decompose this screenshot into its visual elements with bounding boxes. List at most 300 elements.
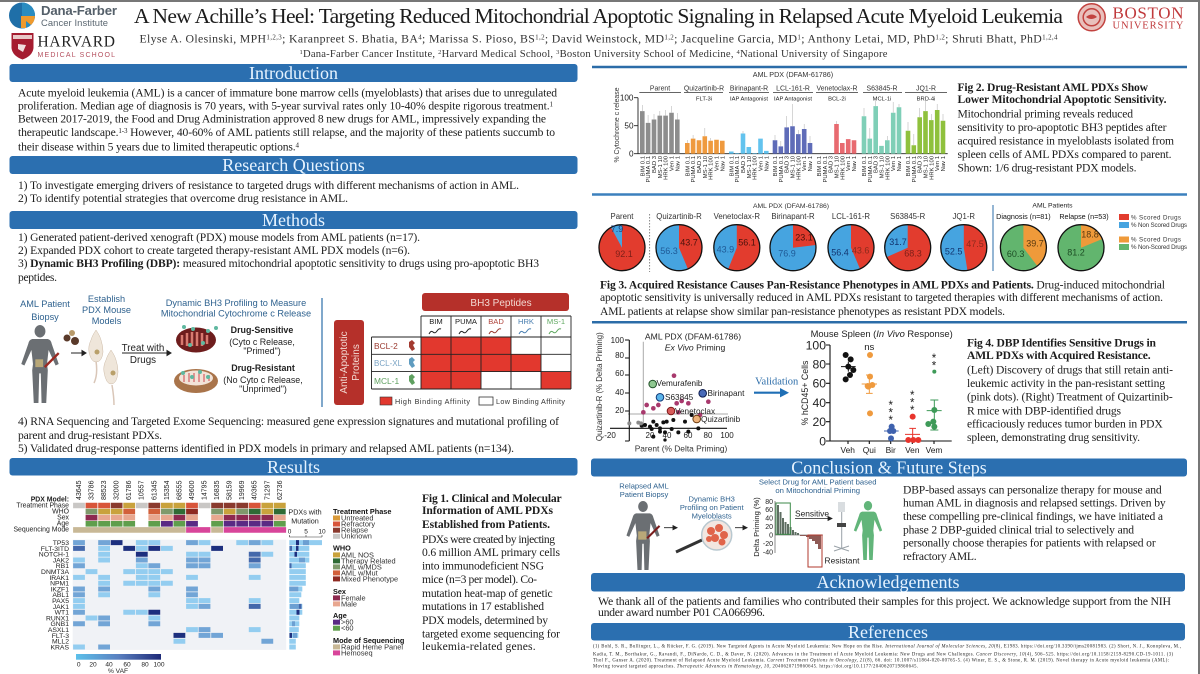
legend: sex: Male — [341, 599, 357, 608]
logo: Boston University — [1078, 4, 1184, 32]
significance markers: * — [910, 398, 915, 410]
text block: figure 2 caption: sensitivity to pro-apoptotic BH3 peptides after — [958, 121, 1167, 134]
gene labels: RUNX1 — [46, 615, 69, 622]
chart: PDXs with mutation bars: 5 — [304, 528, 308, 536]
peptide labels: HRK — [518, 317, 534, 326]
legend: pie charts: % Scored Drugs — [1131, 214, 1181, 222]
text block: introduction: their disease within 5 years due to limited therapeutic options. — [18, 140, 296, 154]
legend: mode of sequencing: Rapid Heme Panel — [341, 642, 403, 651]
logo: Harvard Medical School: MEDICAL SCHOOL — [38, 52, 115, 59]
dot plot axes: 20 — [812, 415, 826, 429]
text block: figure 1 caption: mice (n=3 per model). Co- — [422, 573, 537, 586]
pie labels: Venetoclax-R — [714, 212, 760, 221]
authors: 1,2 — [535, 34, 545, 42]
axes — [614, 87, 948, 163]
error bars — [642, 101, 943, 146]
affiliations: 1 — [300, 49, 303, 56]
drug tick labels: Ven 1 — [891, 156, 897, 171]
chart: PDXs with mutation bars: 10 — [318, 528, 326, 536]
logo: Harvard Medical School: HARVARD — [38, 34, 115, 50]
pie: birinapant-R — [770, 225, 816, 271]
pie labels: JQ1-R — [953, 212, 975, 221]
label: relapsed AML biopsy — [619, 482, 669, 499]
legend: mode of sequencing — [333, 636, 404, 657]
group headers: Venetoclax-R — [817, 86, 858, 92]
chart: PDXs with mutation bars: PDXs with — [288, 508, 322, 516]
text block: conclusion: these compelling pre-clinical findings, we have initiated a — [903, 510, 1163, 523]
text: drug-resistant: (No Cyto c Release, — [223, 375, 303, 385]
pie: venetoclax-R — [714, 225, 760, 271]
scatter titles: Ex Vivo Priming — [665, 342, 725, 352]
text: drug-sensitive — [229, 325, 295, 356]
pie labels: LCL-161-R — [832, 212, 870, 221]
heading: references: References — [848, 622, 928, 642]
label: dynamic BH3 profiling on myeloblasts — [680, 494, 744, 520]
heading: anti-apoptotic proteins: Proteins — [351, 344, 362, 381]
text block: introduction: therapeutic landscape. — [18, 126, 119, 139]
dot plot axes — [800, 338, 952, 455]
text block: introduction: 4 — [296, 142, 300, 150]
peptide labels: BAD — [488, 317, 504, 326]
drug tick labels: HRK 100 — [885, 155, 891, 180]
scatter points — [627, 373, 711, 442]
dot plot axes: 40 — [812, 396, 826, 410]
model id labels: 61786 — [126, 480, 133, 500]
pie labels: Diagnosis (n=81) — [996, 212, 1051, 221]
chart title: AML PDX (DFAM-61786) — [753, 70, 833, 79]
scatter axes: 20 — [615, 406, 625, 415]
drug tick labels: BIM 0.1 — [906, 156, 912, 176]
bars: LCL-161-R — [775, 126, 810, 154]
group headers: IAP Antagonist — [774, 96, 812, 102]
scatter axes: 100 — [611, 336, 625, 345]
text block: conclusion — [903, 484, 1166, 563]
legend: binding affinity — [380, 397, 565, 406]
drug tick labels: BAD 3 — [697, 155, 703, 173]
annotation tracks — [73, 506, 286, 530]
label: dynamic BH3 profiling on myeloblasts: Myeloblasts — [692, 512, 732, 520]
annotation row labels — [13, 496, 70, 534]
group headers: LCL-161-R — [776, 86, 810, 92]
legend: WHO: WHO — [333, 544, 351, 552]
group headers: S63845-R — [866, 86, 898, 92]
text block: methods steps 1-3: 3) Dynamic BH3 Profiling (DBP): measured mitochondrial apoptotic sensitivity to drugs using pro-apoptotic BH3 — [18, 257, 539, 270]
affiliations: Dana-Farber Cancer Institute, — [303, 49, 438, 60]
pie: JQ1-R — [941, 225, 987, 271]
label: dynamic BH3 profiling — [161, 298, 311, 318]
text block: methods steps 1-3: 1) Generated patient-derived xenograft (PDX) mouse models from AML patients (n=17). — [18, 231, 420, 244]
drug tick labels: Ven 1 — [758, 156, 764, 171]
icon: IV stand — [834, 502, 849, 551]
pie: diagnosis: 60.3 — [1007, 249, 1024, 259]
text block: figure 4 caption: Fig 4. DBP Identifies Sensitive Drugs in — [967, 336, 1157, 350]
legend: binding affinity: Low Binding Affinity — [496, 397, 565, 406]
scatter axes: Parent (% Delta Priming) — [635, 444, 728, 454]
text block: figure 1 caption: mutations in 17 established — [422, 600, 544, 613]
label: establish PDX mouse models: Establish — [88, 294, 125, 304]
dot plot axes: % hCD45+ Cells — [800, 360, 810, 425]
pie labels — [611, 212, 1109, 221]
dot plot axes: Bir — [886, 445, 896, 455]
model id labels — [76, 480, 284, 500]
icon: human figure responder — [854, 501, 882, 560]
gene labels: MLL2 — [52, 639, 69, 646]
group headers: FLT-3i — [696, 96, 712, 102]
chart: delta priming waterfall: 80 — [765, 499, 773, 506]
group headers: BCL-2i — [828, 96, 846, 102]
text block: research questions — [18, 179, 519, 205]
chart: delta priming waterfall: 20 — [765, 524, 773, 531]
group headers: IAP Antagonist — [730, 96, 768, 102]
pie: diagnosis: 39.7 — [1026, 238, 1044, 248]
text block: figure 1 caption: targeted exome sequencing for — [422, 628, 560, 640]
pie: LCL-161-R: 43.6 — [852, 245, 869, 255]
heading: introduction — [10, 63, 578, 83]
chart: delta priming waterfall: -40 — [763, 550, 773, 556]
drug tick labels: Ven 1 — [714, 156, 720, 171]
heading: acknowledgements — [591, 572, 1185, 592]
peptide labels — [429, 317, 565, 334]
heading: methods — [10, 210, 578, 230]
icon: patient cells — [64, 330, 79, 345]
model id labels: 49600 — [189, 480, 196, 500]
legend: WHO: Therapy Related — [341, 556, 396, 565]
scatter axes: 80 — [704, 431, 713, 440]
drug tick labels: PUMA 0.1 — [823, 156, 829, 183]
legend: treatment phase — [333, 507, 391, 541]
text block: figure 1 caption: PDX models, determined by — [422, 614, 548, 627]
drug tick labels: MS-1 10 — [790, 155, 796, 178]
chart titles — [753, 202, 1073, 210]
drug tick labels: Nav 1 — [808, 156, 814, 171]
drug tick labels: PUMA 0.1 — [868, 156, 874, 183]
legend: colour scale: 100 — [153, 662, 165, 668]
text: drug-sensitive: (Cyto c Release, — [229, 337, 295, 347]
text block: methods steps 1-3: 2) Expanded PDX cohort to create targeted therapy-resistant AML PDX models (n=6). — [18, 244, 410, 257]
drug tick labels: PUMA 0.1 — [646, 156, 652, 183]
legend: sex: Sex — [333, 587, 346, 596]
pie: S63845-R — [885, 225, 931, 271]
text block: figure 2 caption — [958, 81, 1174, 174]
diagram: clinical workflow — [619, 478, 882, 570]
text block: figure 3 caption: apoptotic sensitivity is universally reduced in AML PDXs resistant to targeted therapies with different mechanisms of action. — [600, 291, 1163, 304]
pie: relapse — [1058, 225, 1104, 271]
chart titles: AML Patients — [1032, 202, 1073, 210]
drug tick labels: Nav 1 — [941, 156, 947, 171]
drug tick labels: PUMA 0.1 — [691, 156, 697, 183]
scatter axes: 20 — [646, 431, 655, 440]
icon: primed mitochondrion — [176, 325, 218, 352]
arrow: patient to profiling — [664, 526, 677, 530]
gene labels: ASXL1 — [48, 627, 69, 634]
drug tick labels: Ven 1 — [935, 156, 941, 171]
gene labels: IRAK1 — [49, 575, 69, 582]
text block: introduction: 1-3 — [118, 127, 128, 135]
legend: colour scale: 60 — [123, 662, 131, 668]
drug tick labels: BAD 3 — [785, 155, 791, 173]
pie: quizartinib-R: 56.3 — [660, 246, 678, 256]
drug tick labels: PUMA 0.1 — [912, 156, 918, 183]
authors: ; Jacqueline Garcia, MD — [674, 32, 798, 46]
significance markers: * — [932, 353, 937, 365]
drug tick labels: MS-1 10 — [834, 155, 840, 178]
text block: acknowledgements: We thank all of the patients and families who contributed their samples for this project. We acknowledge support from the NIH — [598, 594, 1171, 608]
drug tick labels: MS-1 10 — [747, 155, 753, 178]
divider line — [321, 298, 323, 407]
legend: age: Age — [333, 611, 347, 620]
legend: treatment phase: Unknown — [341, 532, 372, 541]
text block: figure 1 caption: into immunodeficient NSG — [422, 560, 545, 572]
label: AML patient biopsy: Biopsy — [31, 312, 59, 322]
gene labels: KRAS — [50, 644, 69, 651]
scatter axes: Quizartinib-R (% Delta Priming) — [595, 332, 604, 441]
text block: methods steps 4-5 — [18, 415, 559, 455]
text: drug-sensitive: "Primed") — [243, 346, 281, 356]
title: A New Achille’s Heel: Targeting Reduced Mitochondrial Apoptotic Signaling in Relapsed Acute Myeloid Leukemia — [134, 4, 1063, 28]
dots — [841, 352, 942, 443]
text block: references: (1) Bohl, S. R., Bullinger, L., & Rücker, F. G. (2019). New Targeted Agents in Acute Myeloid Leukemia: New Hope on the Rise. International Journal of Molecular Sciences, 20(8), E1983. https://doi.org/10.3390/ijms20081983. (2) Short, N. J., Konopleva, M., — [593, 645, 1181, 650]
logo: Dana-Farber Cancer Institute: Dana-Farber — [41, 3, 117, 18]
group headers — [639, 86, 947, 102]
label: dynamic BH3 profiling on myeloblasts: Dynamic BH3 — [688, 494, 735, 504]
annotation row labels: Sequencing Mode — [13, 526, 69, 534]
arrow: treat with drugs: Drugs — [130, 355, 156, 366]
scatter axes: -20 — [604, 431, 616, 440]
legend: pie charts: % Non Scored Drugs — [1131, 222, 1187, 229]
panel: conclusion and future steps — [591, 458, 1187, 570]
text block: methods steps 1-3 — [18, 231, 539, 284]
annotation row labels: Sex — [57, 514, 70, 522]
text block: figure 2 caption: Fig 2. Drug-Resistant AML PDXs Show — [958, 81, 1149, 94]
text block: figure 2 caption: acquired resistance in myeloblasts isolated from — [958, 134, 1174, 148]
protein row labels: BCL-XL — [374, 359, 403, 368]
authors: ; Shruti Bhatt, PhD — [945, 32, 1042, 46]
icon: mice — [89, 330, 118, 405]
chart: PDXs with mutation bars: 0 — [288, 528, 292, 536]
affiliations: Boston University School of Medicine, — [560, 49, 736, 60]
gene labels: RB1 — [56, 563, 69, 570]
text block: figure 4 caption: efficaciously reduces tumor burden in PDX — [967, 418, 1163, 430]
drug tick labels: HRK 100 — [753, 155, 759, 180]
text block: figure 4 caption: R mice with DBP-identified drugs — [967, 404, 1121, 418]
drug tick labels: HRK 100 — [709, 155, 715, 180]
drug tick labels — [640, 155, 947, 183]
label: establish PDX mouse models — [82, 294, 131, 326]
panel: results — [10, 457, 578, 674]
text block: methods steps 4-5: parent and drug-resistant PDXs. — [18, 429, 162, 442]
group headers: JQ1-R — [916, 86, 936, 92]
drug tick labels: Nav 1 — [764, 156, 770, 171]
pie: LCL-161-R — [828, 225, 874, 271]
bars: parent — [642, 111, 677, 154]
pie labels: Birinapant-R — [771, 212, 815, 221]
chart: cytochrome c release bar chart — [614, 70, 948, 183]
panel: methods — [10, 210, 578, 455]
text block: introduction: Between 2017-2019, the Food and Drug Administration approved 8 new drugs for AML, impressively expanding the — [18, 112, 546, 126]
arrow: treat with drugs: Treat with — [122, 343, 164, 354]
text: drug-sensitive: Drug-Sensitive — [231, 325, 293, 335]
text block: introduction: 1 — [550, 100, 554, 108]
heat map cells — [73, 540, 286, 650]
labelled drug: birinapant: Birinapant — [708, 389, 745, 398]
text block: acknowledgements — [598, 594, 1171, 619]
heading: acknowledgements: Acknowledgements — [817, 572, 959, 592]
gene labels: IKZF1 — [50, 586, 69, 593]
legend: treatment phase: Untreated — [341, 513, 373, 522]
chart: co-mutation heat map — [13, 480, 404, 674]
gene labels: FLT-3 — [52, 633, 69, 640]
drug tick labels: Nav 1 — [720, 156, 726, 171]
legend: treatment phase: Treatment Phase — [333, 507, 391, 516]
pie: birinapant-R: 23.1 — [795, 233, 813, 243]
legend: sex — [333, 587, 366, 608]
gene labels: PAX5 — [52, 598, 69, 605]
icon: human figure biopsy — [21, 325, 59, 403]
gene labels: JAK2 — [53, 557, 69, 564]
text block: figure 2 caption: spleen cells of AML PDXs compared to parent. — [958, 148, 1172, 161]
model id labels: 15354 — [164, 480, 171, 500]
authors: 1,2 — [664, 34, 674, 42]
icon: magnifying glass on cells — [676, 520, 732, 552]
panel: references — [591, 622, 1185, 670]
drug tick labels: PUMA 0.1 — [779, 156, 785, 183]
text block: figure 4 caption: AML PDXs with Acquired Resistance. — [967, 349, 1151, 362]
label: AML patient biopsy — [20, 299, 70, 322]
model id labels: 33786 — [88, 480, 96, 500]
chart titles: AML PDX (DFAM-61786) — [753, 203, 829, 210]
text block: figure 1 caption: leukemia-related genes. — [422, 640, 536, 653]
drug tick labels: HRK 100 — [929, 155, 935, 180]
pie: S63845-R: 31.7 — [889, 237, 907, 247]
logo: Dana-Farber Cancer Institute: Cancer Institute — [41, 17, 108, 28]
legend: pie charts: % Scored Drugs — [1131, 236, 1181, 244]
authors: 1,2,3 — [266, 34, 282, 42]
chart: PDXs with mutation bars: Mutation — [291, 516, 319, 526]
text block: research questions: 1) To investigate emerging drivers of resistance to targeted drugs with different mechanisms of action in AML. — [18, 179, 519, 192]
heading: BH3 peptides — [422, 293, 569, 311]
legend: colour scale: 20 — [89, 662, 97, 668]
text: drug-resistant — [223, 363, 303, 394]
model id labels: 43645 — [76, 480, 83, 500]
model id labels: 16835 — [214, 480, 221, 500]
logo: Dana-Farber Cancer Institute — [9, 2, 117, 28]
bars: venetoclax-R — [836, 124, 854, 154]
legend: pie charts: % Non-Scored Drugs — [1131, 244, 1187, 251]
annotation row labels: WHO — [52, 508, 70, 516]
legend: WHO — [333, 544, 398, 583]
labelled drug: vemurafenib: Vemurafenib — [656, 379, 703, 388]
drug tick labels: Ven 1 — [802, 156, 808, 171]
chart: pie charts — [599, 202, 1187, 272]
model id labels: 62736 — [277, 480, 284, 500]
drug tick labels: PUMA 0.1 — [735, 156, 741, 183]
dot plot axes: 100 — [806, 338, 826, 352]
text block: acknowledgements: under award number P01 CA066996. — [598, 605, 765, 619]
model id labels: 68555 — [176, 480, 183, 500]
pie: parent — [599, 224, 645, 271]
drug tick labels: Ven 1 — [846, 156, 852, 171]
scatter axes: 80 — [615, 351, 625, 360]
pie: LCL-161-R: 56.4 — [831, 248, 849, 258]
drug tick labels: Nav 1 — [897, 156, 903, 171]
gene labels — [39, 540, 69, 651]
label: resistant: Resistant — [825, 556, 860, 566]
legend: mode of sequencing: Hemoseq — [341, 648, 373, 657]
text block: figure 3 caption: AML patients at relapse show similar pan-resistance phenotypes as resistant PDX models. — [600, 305, 1005, 318]
drug tick labels: MS-1 10 — [658, 155, 664, 178]
model id labels: 71297 — [264, 480, 271, 500]
model id labels: 14795 — [202, 480, 208, 500]
labelled drug: quizartinib: Quizartinib — [701, 415, 741, 424]
gene labels: FLT-3ITD — [41, 546, 69, 553]
logo: Boston University: UNIVERSITY — [1112, 20, 1184, 32]
drug tick labels: HRK 100 — [796, 155, 802, 180]
pie: diagnosis — [1000, 225, 1046, 271]
model id labels: 61345 — [151, 480, 158, 500]
drug tick labels: BAD 3 — [874, 155, 880, 173]
bars: birinapant-R — [731, 134, 766, 154]
pie labels: Quizartinib-R — [656, 212, 702, 221]
drug tick labels: BAD 3 — [829, 155, 835, 173]
authors: 1,2 — [935, 34, 945, 42]
drug tick labels: BIM 0.1 — [773, 156, 779, 176]
peptide labels: MS-1 — [547, 317, 565, 326]
arrow: sensitive: Sensitive — [795, 508, 829, 518]
panel: figure 3 — [592, 202, 1187, 322]
panel: research questions — [10, 155, 578, 205]
group headers: Quizartinib-R — [684, 86, 724, 92]
pie labels: Relapse (n=53) — [1059, 212, 1109, 221]
text: drug-resistant: Drug-Resistant — [231, 363, 295, 373]
text block: figure 1 caption: 0.6 million AML primary cells — [422, 546, 560, 559]
panel: figure 2 — [592, 67, 1187, 194]
panel: figure 4 — [595, 328, 1173, 455]
pie: S63845-R: 68.3 — [904, 249, 922, 259]
label: dynamic BH3 profiling: Dynamic BH3 Profiling to Measure — [166, 298, 306, 308]
heading: anti-apoptotic proteins: Anti-Apoptotic — [339, 331, 350, 394]
axes: 100 — [620, 94, 634, 103]
scatter axes: 40 — [615, 388, 625, 397]
arrow: profiling to selection — [735, 526, 747, 530]
chart: delta priming waterfall — [752, 497, 823, 567]
drug tick labels: HRK 100 — [840, 155, 846, 180]
significance markers: * — [910, 390, 915, 402]
annotation row labels: PDX Model: — [31, 496, 69, 504]
text: drug-resistant: "Unprimed") — [239, 384, 287, 394]
text block: references — [593, 645, 1181, 670]
legend: WHO: Mixed Phenotype — [341, 574, 398, 583]
panel: introduction — [10, 63, 578, 154]
model id labels: 58159 — [227, 480, 234, 500]
text block: figure 1 caption — [422, 492, 562, 653]
dot plot axes: Vem — [926, 445, 942, 455]
chart: mouse spleen dot plot — [800, 328, 953, 455]
significance markers: * — [888, 408, 893, 420]
text block: figure 1 caption: Established from Patients. — [422, 518, 550, 531]
heading: conclusion: Conclusion & Future Steps — [791, 458, 987, 478]
text block: methods steps 1-3: peptides. — [18, 271, 57, 284]
pie: JQ1-R: 47.5 — [966, 239, 984, 249]
label: relapsed AML biopsy: Patient Biopsy — [620, 490, 668, 499]
heading: results — [10, 457, 578, 477]
legend: WHO: AML w/MDS — [341, 562, 382, 571]
text block: research questions: 2) To identify potential strategies that overcome drug resistance in AML. — [18, 192, 348, 205]
heading: research questions: Research Questions — [222, 155, 365, 175]
text block: figure 4 caption — [967, 336, 1173, 444]
text block: figure 1 caption: mutation heat-map of genetic — [422, 587, 553, 600]
model id labels: 32000 — [114, 480, 121, 500]
significance markers: ns — [864, 342, 875, 353]
